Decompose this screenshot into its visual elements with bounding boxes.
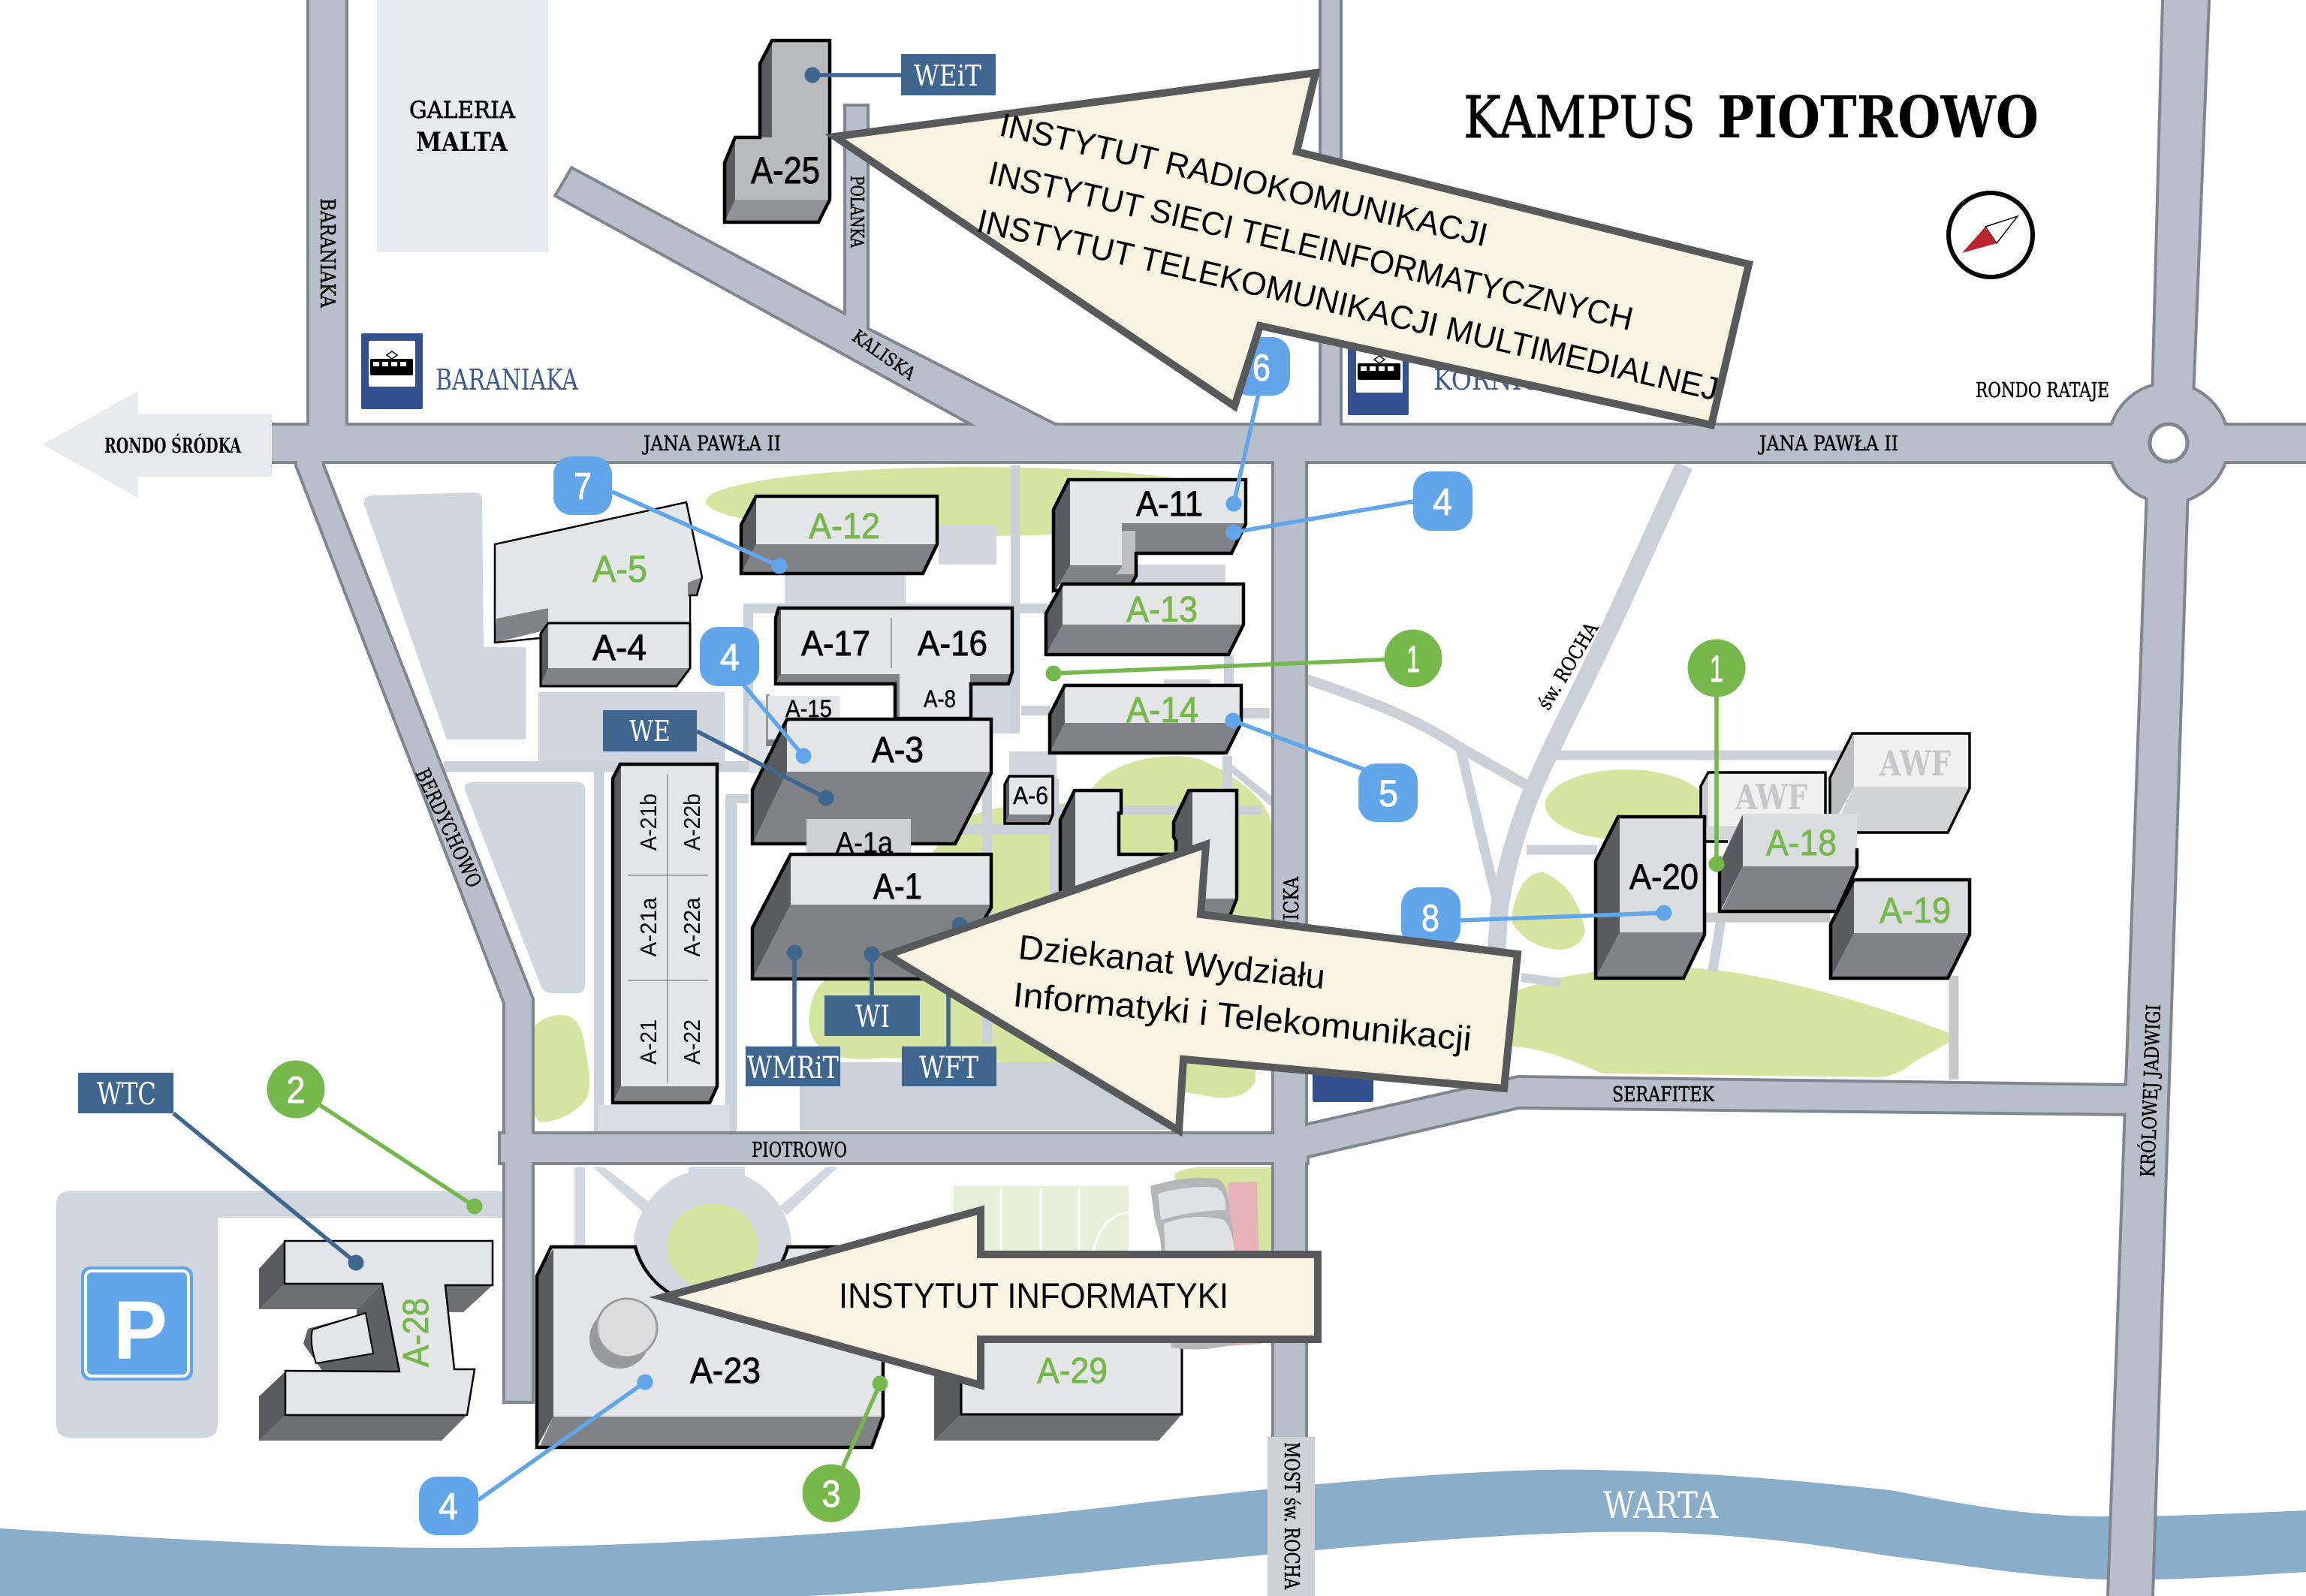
street labels: RONDO RATAJE [1976,379,2109,402]
building A-11: A-11 [1136,483,1203,523]
WTC callout [78,1073,363,1270]
building A-14: A-14 [1126,691,1198,730]
building A-17 / A-16 / A-8 [776,608,1012,718]
building A-20 [1596,817,1705,978]
green callout 1 (centre) [1045,629,1442,688]
blue callout 4 (A-3): 4 [720,637,740,679]
river Warta [0,1470,2306,1596]
building A-28 [259,1241,493,1441]
building A-21 / A-22 [613,764,717,1103]
green callout 1 (A-18) [1688,640,1745,872]
street labels: JANA PAWŁA II [641,432,781,456]
street labels: PIOTROWO [752,1139,847,1162]
building A-29: A-29 [1037,1351,1108,1391]
building AWF (back) [1701,772,1825,842]
building AWF (right): AWF [1879,743,1951,784]
WEiT callout [805,54,996,95]
building A-4: A-4 [592,628,647,668]
building A-12 [741,496,937,574]
green areas [535,467,1957,1269]
WI callout [824,946,920,1036]
building A-3: A-3 [872,730,924,770]
sports hall (inflated domes) [1150,1178,1262,1350]
street labels: SERAFITEK [1612,1083,1715,1107]
building A-4 [541,623,690,686]
arrow: dean's office: Informatyki i Telekomunikacji [1011,974,1473,1058]
blue callout 6 [1225,337,1290,512]
building A-1 [752,854,991,979]
blue callout 5 [1225,713,1418,822]
building A-23 [537,1247,883,1447]
blue callout 7: 7 [574,465,592,507]
green callout 1 (centre): 1 [1406,638,1420,680]
building A-19 [1831,880,1970,978]
blue callout 7 [553,456,787,574]
arrow: dean's office: Dziekanat Wydziału [1017,927,1327,996]
street labels: BARANIAKA [315,198,339,308]
building A-17 / A-16 / A-8: A-8 [924,685,956,712]
building A-20: A-20 [1629,857,1699,896]
building A-18: A-18 [1766,824,1837,863]
building A-1: A-1 [873,867,922,907]
WE callout: WE [629,715,671,748]
arrow: institutes at A-25: INSTYTUT TELEKOMUNIKACJI MULTIMEDIALNEJ [974,203,1722,408]
green callout 1 (A-18): 1 [1710,648,1723,690]
title: KAMPUS [1463,85,1696,152]
blue callout 4 (A-11): 4 [1433,481,1452,523]
building A-18 [1705,814,1857,911]
building A-1a [806,819,911,860]
blue callout 8: 8 [1421,897,1439,939]
building A-21 / A-22: A-22 [679,1019,705,1065]
green callout 3: 3 [821,1473,841,1515]
river label: WARTA [1603,1484,1719,1527]
Galeria Malta block: GALERIA [409,97,516,124]
blue callout 4 (A-23) [419,1374,653,1535]
arrow: dean's office [888,845,1518,1131]
WTC callout: WTC [97,1077,156,1112]
plaza near A-23 [574,1167,837,1325]
building A-25 [725,41,830,222]
arrow: institute of computer science: INSTYTUT INFORMATYKI [839,1275,1228,1315]
right side walkways [1307,465,1843,983]
WMRiT callout: WMRiT [747,1051,839,1086]
building A-17 / A-16 / A-8: A-16 [918,623,987,663]
WI callout: WI [855,1000,890,1034]
title: PIOTROWO [1717,84,2039,152]
building A-13 [1046,584,1243,655]
arrow: institutes at A-25: INSTYTUT SIECI TELEINFORMATYCZNYCH [985,155,1637,338]
blue callout 6: 6 [1252,347,1271,389]
street labels: KÓRNICKA [1278,877,1304,973]
building A-3 [752,719,991,844]
building A-29 [934,1336,1182,1441]
building A-15: A-15 [785,695,832,722]
building A-2 (U shaped, partly hidden) [1060,790,1237,927]
street labels: JANA PAWŁA II [1757,432,1898,456]
building A-14 [1050,685,1241,753]
building A-21 / A-22: A-21b [635,793,662,851]
building A-6: A-6 [1013,781,1048,809]
tram stop: Baraniaka [361,333,578,409]
Galeria Malta block [377,0,548,252]
building A-11 [1054,480,1246,591]
blue callout 4 (A-11) [1225,471,1473,541]
icon: parking sign [81,1266,193,1381]
green callout 3 [802,1375,888,1522]
tram stop: Kórnicka: KÓRNICKA [1433,363,1576,396]
title [1463,84,2039,152]
arrow: Rondo Śródka [43,391,272,498]
tram stop: Serafitek [1313,1028,1373,1102]
street labels: KRÓLOWEJ JADWIGI [2136,1004,2166,1177]
street labels: BERDYCHOWO [410,765,486,891]
street labels: POLANKA [846,176,867,248]
tram stop: Baraniaka: BARANIAKA [436,363,578,396]
building A-21 / A-22: A-22b [679,793,705,851]
bridge label box [1268,1437,1315,1596]
building A-21 / A-22: A-21a [635,897,662,956]
Galeria Malta block: MALTA [416,127,508,158]
building A-23: A-23 [690,1351,761,1391]
building A-15 [766,694,840,746]
building A-17 / A-16 / A-8: A-17 [801,623,870,663]
street labels: KALISKA [849,326,920,384]
blue callout 5: 5 [1379,772,1398,815]
building A-5 [495,502,702,643]
WE callout [603,710,833,806]
building A-21 / A-22: A-21 [635,1019,662,1065]
arrow: Rondo Śródka: RONDO ŚRÓDKA [104,432,242,458]
building A-25: A-25 [751,149,820,191]
blue callout 4 (A-23): 4 [439,1486,458,1528]
tram stop: Kórnicka [1348,339,1576,415]
dot on building A-2 [1203,916,1219,932]
street labels: św. ROCHA [1534,618,1604,714]
blue callout 4 (A-3) [700,627,811,764]
icon: compass [1949,193,2033,277]
parking access [56,1191,502,1438]
WFT callout: WFT [919,1051,978,1086]
building A-1a: A-1a [836,827,894,860]
icon: parking sign: P [113,1284,167,1377]
WMRiT callout [746,944,840,1086]
sports field [954,1186,1129,1269]
building A-19: A-19 [1879,891,1951,931]
arrow: institutes at A-25: INSTYTUT RADIOKOMUNIKACJI [996,107,1491,254]
WEiT callout: WEiT [914,59,981,92]
WFT callout [902,917,996,1086]
building A-21 / A-22: A-22a [679,897,705,956]
green callout 2: 2 [287,1069,305,1111]
building A-6 [1005,776,1053,824]
building A-13: A-13 [1126,590,1198,630]
street labels [315,176,2166,1177]
arrow: institutes at A-25 [835,73,1749,425]
green callout 2 [267,1060,482,1215]
building A-12: A-12 [809,507,880,547]
walkways and parking pads [56,465,1954,1438]
building A-5: A-5 [592,548,647,590]
building AWF (back): AWF [1735,777,1807,818]
arrow: institute of computer science [663,1210,1318,1385]
building A-28: A-28 [396,1298,436,1367]
blue callout 8 [1401,887,1671,947]
building AWF (right) [1830,733,1970,833]
